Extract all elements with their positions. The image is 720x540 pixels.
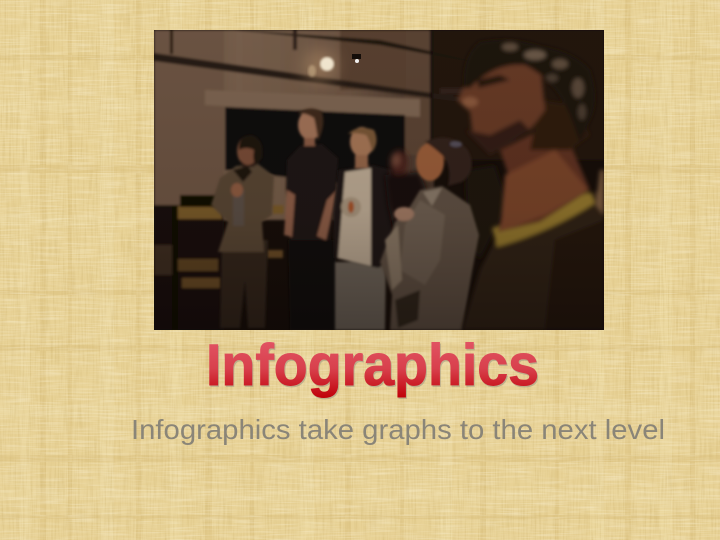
photo: woman in knitted grey cardigan (380, 138, 479, 330)
photo: people in the back row (385, 148, 500, 222)
photo backdrop: brick wall, beams and light (154, 30, 604, 290)
subtitle: Infographics take graphs to the next level: Infographics take graphs to the next level (131, 414, 665, 445)
photo: stage light (303, 49, 361, 83)
photo: audience looking up in a dim warehouse (154, 30, 604, 330)
photo: foreground man in cap (457, 40, 604, 330)
photo: dim tone overlay (154, 30, 604, 330)
photo: blond man in white t-shirt and hoodie (333, 127, 392, 330)
title: Infographics: Infographics (206, 333, 539, 398)
title: Infographics: Infographics (207, 334, 540, 400)
photo: man with beard in tan jacket (211, 135, 274, 328)
photo: man in black shirt (282, 107, 338, 242)
